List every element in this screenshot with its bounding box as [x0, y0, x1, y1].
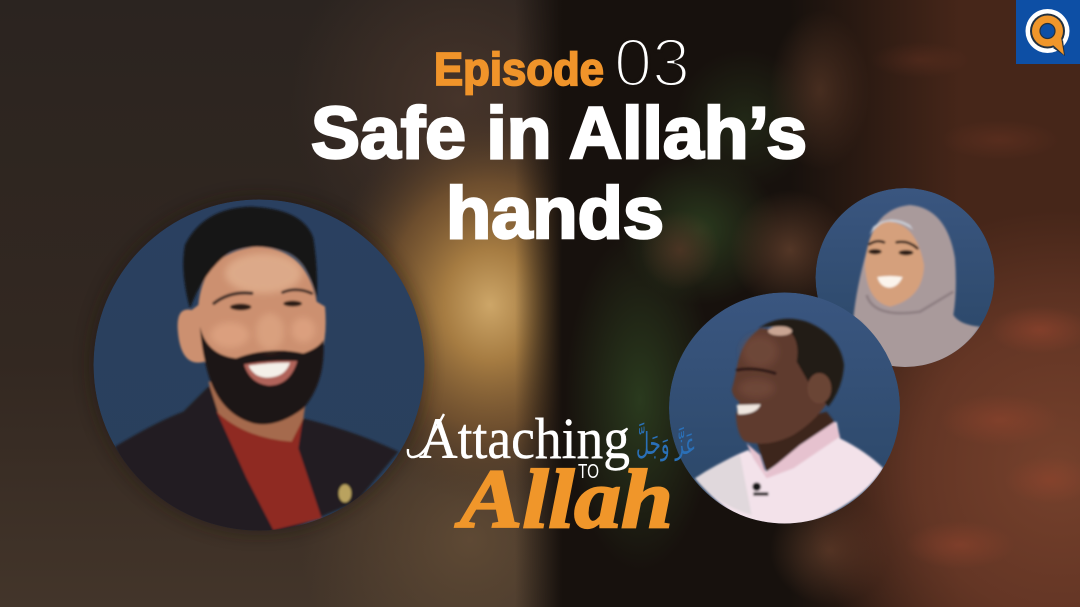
- headline line one: Safe in Allah’s: [311, 93, 807, 174]
- nose: [256, 313, 284, 350]
- eye crease: [737, 369, 775, 373]
- logo word: TO: TO: [578, 461, 599, 483]
- beard: [200, 327, 324, 424]
- head: [732, 328, 832, 444]
- eyes: [868, 249, 913, 255]
- speech-bubble Q mark: [1026, 9, 1070, 56]
- portrait: main speaker: [94, 200, 424, 535]
- episode label: Episode: [434, 43, 604, 95]
- episode number: 03: [614, 25, 690, 101]
- teeth: [249, 363, 290, 378]
- cheek highlights: [211, 317, 315, 348]
- logo word: Allah: Allah: [454, 453, 673, 546]
- lapel mic: [752, 482, 768, 496]
- face shading: [738, 335, 778, 398]
- collar: [747, 422, 840, 478]
- under-scarf: [869, 220, 913, 235]
- grey shoulder: [695, 455, 752, 515]
- series logo: [408, 406, 696, 546]
- headline line two: hands: [446, 173, 664, 254]
- hijab: [853, 205, 980, 372]
- teeth: [737, 404, 761, 414]
- circle shadow: [89, 195, 429, 535]
- neck: [208, 382, 307, 442]
- pink shirt: [695, 422, 883, 527]
- logo swash: [408, 414, 444, 457]
- lapel pin: [339, 484, 351, 502]
- jacket: [115, 387, 398, 535]
- brows: [869, 241, 917, 248]
- network logo badge: [1016, 0, 1080, 64]
- cap: [183, 207, 317, 308]
- title: [311, 25, 807, 254]
- neck: [753, 412, 837, 472]
- red turtleneck: [217, 412, 322, 530]
- forehead highlight: [225, 253, 302, 293]
- logo word: Attaching: Attaching: [419, 406, 630, 471]
- logo Arabic honorific: عَزَّ وَجَلَّ: [636, 423, 696, 462]
- face: [865, 222, 924, 307]
- portrait: man in pink shirt: [669, 292, 900, 527]
- hijab fold: [867, 292, 953, 313]
- forehead shine: [768, 326, 792, 336]
- mouth: [244, 361, 297, 386]
- eyes: [230, 301, 302, 310]
- portrait: woman in hijab: [816, 188, 994, 372]
- smile: [877, 276, 903, 288]
- hair: [758, 319, 844, 407]
- head: [178, 247, 326, 408]
- ear: [807, 373, 831, 404]
- brows: [214, 290, 312, 303]
